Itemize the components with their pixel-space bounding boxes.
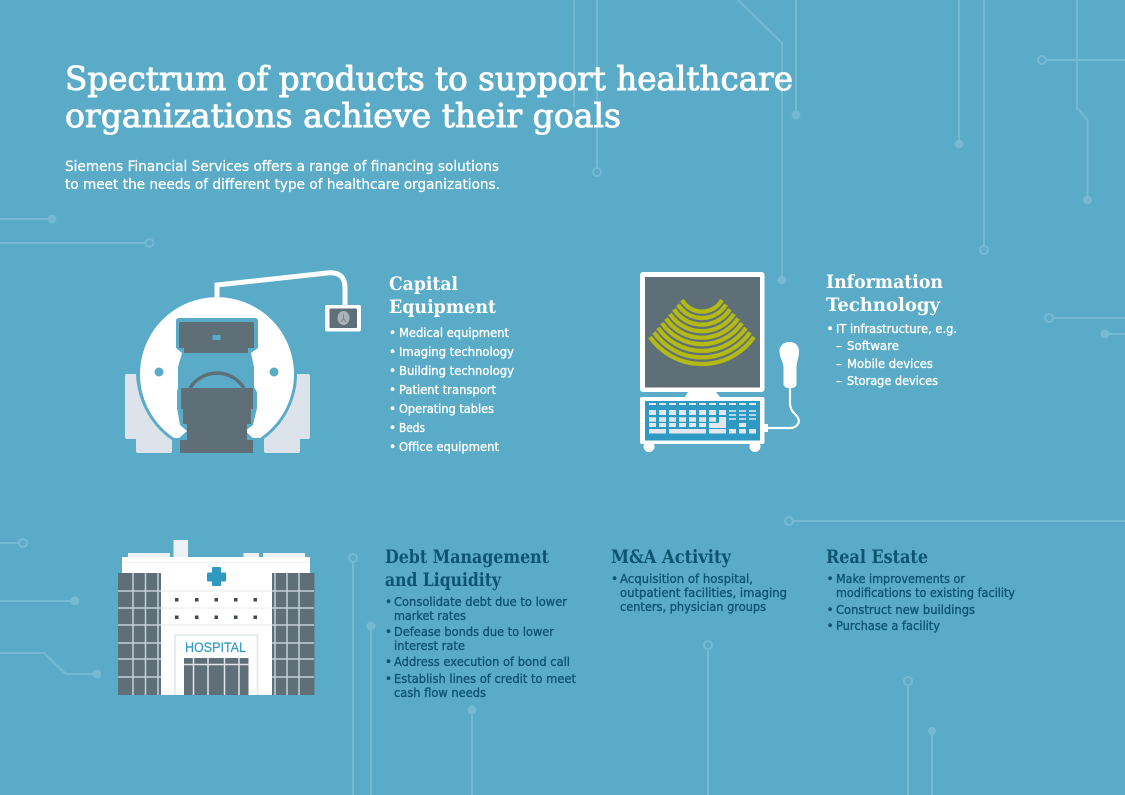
scanner gantry (137, 294, 297, 454)
heading: debt management: and Liquidity (385, 570, 502, 591)
patient table (180, 373, 253, 453)
list: information technology: – (836, 339, 842, 353)
monitor (640, 272, 764, 392)
list: real estate: • (826, 603, 834, 617)
list: capital equipment: Building technology (399, 364, 514, 378)
list: capital equipment: Imaging technology (399, 345, 514, 359)
title (65, 60, 793, 135)
heading: information technology: Information (826, 272, 944, 293)
heading: debt management: Debt Management (385, 547, 549, 568)
list: information technology: IT infrastructure, e.g. (836, 322, 957, 336)
scanner top unit (179, 322, 254, 353)
heading: capital equipment: Capital (389, 274, 458, 295)
intro text (65, 159, 500, 193)
list: M&A activity: • (611, 572, 618, 586)
heading: information technology: Technology (826, 295, 941, 316)
list: M&A activity: outpatient facilities, imaging (620, 586, 787, 600)
brain scan display (325, 305, 361, 332)
list: information technology: Mobile devices (847, 357, 933, 371)
list: M&A activity: centers, physician groups (620, 600, 766, 614)
list: debt management: market rates (394, 609, 466, 623)
heading: debt management (385, 547, 549, 591)
list: M&A activity: Acquisition of hospital, (620, 572, 753, 586)
heading: capital equipment: Equipment (389, 297, 496, 318)
panel: information technology (826, 272, 957, 388)
list: information technology: Storage devices (847, 374, 938, 388)
list: information technology: – (836, 374, 842, 388)
heading: M&A activity: M&A Activity (611, 547, 732, 568)
heading: capital equipment (389, 274, 496, 318)
list: real estate: Purchase a facility (836, 619, 940, 633)
list: debt management: cash flow needs (394, 686, 486, 700)
intro text: Siemens Financial Services offers a range of financing solutions (65, 159, 499, 175)
list: capital equipment (389, 326, 514, 454)
list: real estate (826, 572, 1015, 633)
roof (122, 557, 310, 574)
list: debt management: • (385, 655, 392, 669)
list: real estate: • (826, 619, 834, 633)
list: capital equipment: Patient transport (399, 383, 496, 397)
list: debt management: • (385, 672, 392, 686)
probe cable (763, 388, 799, 432)
list: real estate: Make improvements or (836, 572, 965, 586)
roof units (128, 540, 305, 558)
heading: real estate: Real Estate (826, 547, 928, 568)
scanner side supports (125, 374, 310, 453)
list: capital equipment: • (389, 383, 396, 397)
ultrasound image (650, 300, 754, 364)
panel: real estate (826, 547, 1015, 633)
list: debt management: Consolidate debt due to lower (394, 595, 567, 609)
list: M&A activity (611, 572, 787, 614)
list: capital equipment: • (389, 364, 396, 378)
list: debt management: Establish lines of credit to meet (394, 672, 576, 686)
list: debt management: • (385, 595, 392, 609)
icon: CT scanner (125, 273, 361, 454)
icon: ultrasound system (640, 272, 799, 452)
list: information technology (826, 322, 957, 388)
list: debt management: interest rate (394, 639, 465, 653)
list: capital equipment: • (389, 345, 396, 359)
list: capital equipment: • (389, 326, 396, 340)
title: organizations achieve their goals (65, 97, 621, 135)
panel: M&A activity (611, 547, 787, 614)
intro text: to meet the needs of different type of healthcare organizations. (65, 177, 500, 193)
list: capital equipment: Medical equipment (399, 326, 509, 340)
list: capital equipment: Operating tables (399, 402, 494, 416)
title: Spectrum of products to support healthcare (65, 60, 793, 98)
list: capital equipment: Beds (399, 421, 425, 435)
panel: capital equipment (389, 274, 514, 454)
hospital entrance (175, 635, 258, 695)
list: information technology: Software (847, 339, 899, 353)
scanner bore (176, 318, 258, 454)
list: capital equipment: Office equipment (399, 440, 499, 454)
medical cross (207, 567, 226, 586)
monitor stand (685, 392, 720, 397)
list: real estate: • (826, 572, 834, 586)
hospital entrance: HOSPITAL (185, 640, 246, 655)
list: real estate: modifications to existing facility (836, 586, 1015, 600)
ultrasound probe (780, 342, 799, 388)
list: debt management: • (385, 625, 392, 639)
list: information technology: – (836, 357, 842, 371)
scanner cable (217, 273, 345, 307)
side windows (118, 573, 314, 695)
list: information technology: • (826, 322, 834, 336)
keyboard (640, 397, 764, 452)
panel: debt management and liquidity (385, 547, 576, 700)
list: capital equipment: • (389, 440, 396, 454)
list: capital equipment: • (389, 402, 396, 416)
list: debt management: Address execution of bond call (394, 655, 570, 669)
scanner side holes (154, 368, 278, 376)
list: capital equipment: • (389, 421, 396, 435)
list: debt management (385, 595, 576, 700)
list: real estate: Construct new buildings (836, 603, 975, 617)
list: debt management: Defease bonds due to lower (394, 625, 554, 639)
hospital facade (161, 573, 272, 695)
icon: hospital building (118, 540, 314, 695)
heading: information technology (826, 272, 944, 316)
